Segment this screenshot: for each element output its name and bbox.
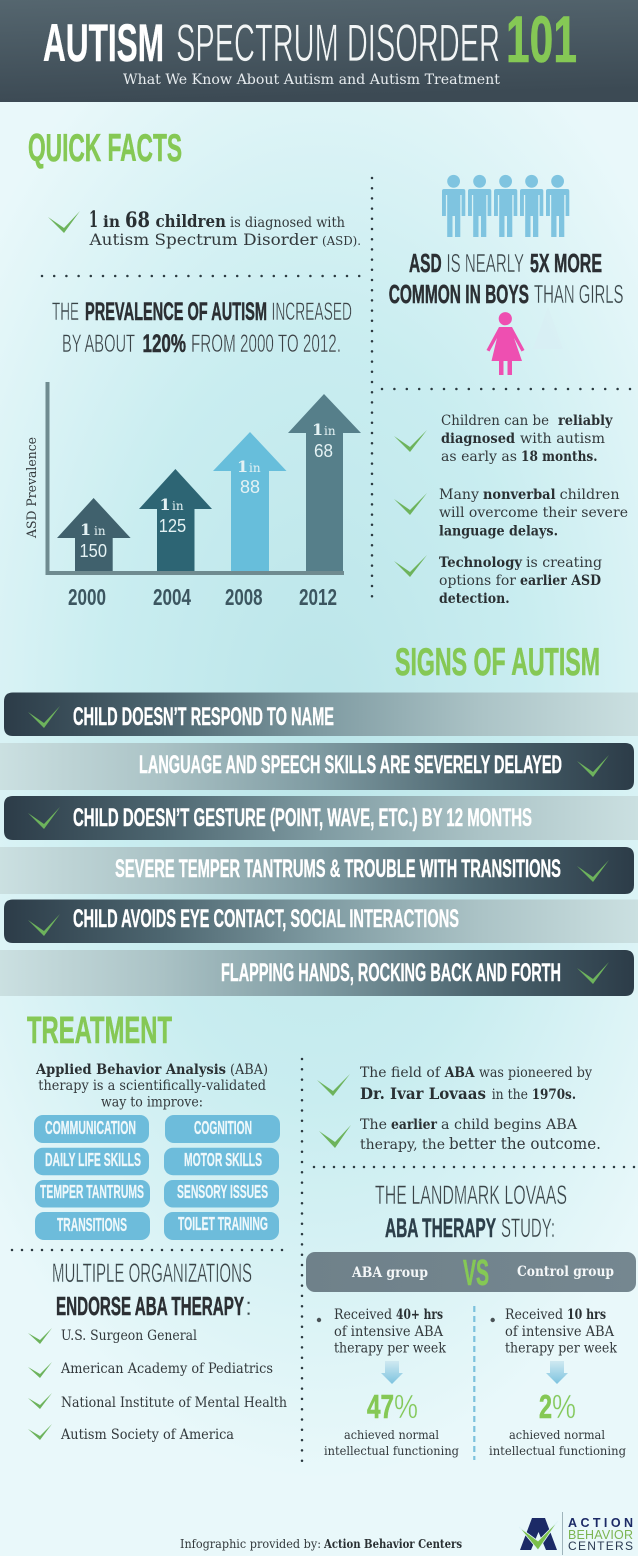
bar chart: ASD prevalence arrows [25, 382, 361, 610]
text: ABA intro: Applied Behavior Analysis [35, 1062, 226, 1078]
text: ABA intro [35, 1062, 268, 1110]
icon: five boys [442, 175, 569, 237]
banner: tantrums [0, 847, 634, 894]
list: organizations: U.S. Surgeon General [61, 1328, 197, 1344]
fact: technology: is creating [526, 555, 602, 571]
arrow 2004: 125 [159, 516, 186, 536]
text: prevalence increased: THE [52, 298, 79, 326]
fact: technology [394, 555, 602, 607]
panel: comparison header: ABA group [351, 1265, 428, 1281]
panel: skill pills: TEMPER TANTRUMS [40, 1182, 144, 1202]
panel: skill pills [34, 1115, 280, 1240]
fact: 1 in 68 children: is diagnosed with [230, 215, 345, 231]
panel: skill pills: COMMUNICATION [45, 1118, 136, 1138]
panel: control group result: 10 hrs [567, 1307, 606, 1323]
arrow 2004: in [172, 499, 184, 513]
year labels: 2012 [299, 584, 337, 610]
footer credit: Infographic provided by: [180, 1537, 321, 1551]
fact: nonverbal children: language delays. [439, 524, 558, 540]
arrow 2004 [139, 469, 212, 571]
text: ABA intro: therapy is a scientifically-validated [38, 1078, 266, 1094]
heading: multiple organizations: ENDORSE ABA THERAPY [56, 1291, 244, 1321]
fact: ABA pioneer: The field of [360, 1065, 441, 1081]
panel: ABA group result: therapy per week [334, 1340, 447, 1356]
fact: ABA pioneer: was pioneered by [479, 1065, 592, 1081]
fact: technology: detection. [439, 591, 510, 607]
banner: language and speech [0, 743, 634, 790]
text: ASD 5x more common in boys [389, 248, 624, 309]
list: organizations: American Academy of Pediatrics [60, 1361, 273, 1377]
panel: control group result: % [552, 1388, 576, 1425]
fact: 1 in 68 children: Autism Spectrum Disorder [88, 230, 318, 249]
panel: ABA group result: % [394, 1388, 418, 1425]
logo: Action Behavior Centers: CENTERS [568, 1539, 633, 1553]
fact: ABA pioneer: ABA [444, 1065, 475, 1081]
panel: ABA group result: achieved normal [344, 1427, 439, 1442]
fact: earlier begins: a child begins ABA [441, 1117, 577, 1133]
text: ABA intro: (ABA) [230, 1062, 268, 1078]
fact: earlier begins [319, 1117, 601, 1153]
divider: dashed comparison [473, 1306, 475, 1460]
panel: skill pills: DAILY LIFE SKILLS [45, 1150, 141, 1170]
fact: 1 in 68 children: 68 [125, 207, 150, 232]
panel: ABA group result: 40+ hrs [396, 1307, 443, 1323]
icon: check [48, 211, 80, 233]
icon: girl [486, 312, 524, 375]
heading: multiple organizations [52, 1258, 252, 1321]
arrow 2000: 150 [80, 541, 107, 561]
fact: ABA pioneer [317, 1065, 592, 1103]
fact: reliably diagnosed [394, 413, 614, 465]
arrow: down [381, 1361, 403, 1384]
arrow 2012 [288, 394, 361, 571]
title: AUTISM [43, 14, 164, 73]
axes [46, 382, 344, 575]
list: organizations [28, 1328, 287, 1443]
fact: earlier begins: earlier [391, 1117, 438, 1133]
arrow 2004: 1 [160, 495, 171, 514]
list: organizations: Autism Society of America [60, 1427, 234, 1443]
panel: comparison header: Control group [517, 1264, 614, 1280]
footer credit [180, 1537, 462, 1551]
fact: reliably diagnosed: diagnosed [441, 431, 516, 447]
heading: quick facts: QUICK FACTS [28, 127, 182, 170]
fact: 1 in 68 children: 1 [89, 207, 98, 233]
fact: 1 in 68 children [48, 207, 361, 249]
fact: 1 in 68 children: (ASD). [322, 234, 361, 248]
subtitle: What We Know About Autism and Autism Treatment [123, 72, 501, 88]
fact: reliably diagnosed: with autism [520, 431, 605, 447]
icon: check [394, 555, 427, 577]
heading: treatment: TREATMENT [27, 1010, 172, 1052]
y axis label: ASD Prevalence [25, 437, 40, 539]
fact: nonverbal children [394, 487, 628, 540]
fact: nonverbal children: nonverbal [483, 487, 556, 503]
panel: control group result: achieved normal [509, 1427, 605, 1442]
fact: reliably diagnosed: reliably [558, 413, 614, 429]
logo: Action Behavior Centers [519, 1512, 633, 1555]
text: prevalence increased: PREVALENCE OF AUTISM [85, 298, 267, 326]
text: prevalence increased: BY ABOUT [62, 330, 135, 358]
arrow 2012: 1 [312, 420, 323, 439]
panel: skill pills: MOTOR SKILLS [184, 1150, 262, 1170]
panel: control group result: Received [505, 1307, 563, 1323]
logo: Action Behavior Centers: BEHAVIOR [568, 1528, 633, 1542]
panel: skill pills: SENSORY ISSUES [177, 1182, 268, 1202]
arrow 2012: 68 [314, 441, 333, 461]
arrow 2000: 1 [80, 520, 91, 539]
text: ASD 5x more common in boys: COMMON IN BOYS [389, 279, 529, 309]
panel: comparison header: VS [463, 1252, 489, 1293]
banner: responds to name [4, 692, 638, 736]
year labels [68, 584, 337, 610]
fact: ABA pioneer: in the [492, 1087, 528, 1103]
list: organizations: National Institute of Mental Health [61, 1395, 287, 1411]
banner: gesture [4, 796, 638, 840]
divider dots: treatment vertical [301, 1059, 303, 1463]
fact: earlier begins: The [360, 1117, 387, 1133]
fact: reliably diagnosed: 18 months. [521, 449, 598, 465]
heading: landmark Lovaas study: STUDY: [501, 1213, 555, 1243]
panel: control group result: 2 [539, 1388, 552, 1425]
fact: reliably diagnosed: as early as [441, 449, 517, 465]
panel: ABA group result: Received [334, 1307, 392, 1323]
text: ASD 5x more common in boys: IS NEARLY [446, 248, 524, 278]
fact: ABA pioneer: Dr. Ivar Lovaas [360, 1084, 486, 1103]
panel: control group result: therapy per week [505, 1340, 618, 1356]
year labels: 2000 [68, 584, 106, 610]
icon: check [394, 430, 427, 452]
icon: check [317, 1074, 350, 1096]
heading: multiple organizations: : [245, 1291, 252, 1321]
text: prevalence increased [52, 298, 352, 358]
footer credit: Action Behavior Centers [323, 1537, 462, 1551]
text: ABA intro: way to improve: [101, 1094, 203, 1110]
heading: multiple organizations: MULTIPLE ORGANIZATIONS [52, 1258, 252, 1288]
icon: faded girl [533, 307, 563, 349]
fact: earlier begins: better the outcome. [449, 1135, 601, 1153]
arrow 2008 [213, 432, 286, 571]
header banner [0, 0, 638, 102]
panel: comparison header [306, 1252, 636, 1293]
panel: control group result: intellectual functioning [489, 1443, 626, 1458]
fact: nonverbal children: Many [439, 487, 479, 503]
banner: flapping hands [0, 950, 634, 996]
arrow 2008: 88 [240, 477, 260, 497]
year labels: 2008 [225, 584, 263, 610]
arrow 2008: in [249, 461, 261, 475]
arrow 2012: in [324, 424, 336, 438]
panel: ABA group result: 47 [367, 1388, 394, 1425]
panel: ABA group result: of intensive ABA [334, 1324, 443, 1340]
year labels: 2004 [153, 584, 191, 610]
fact: 1 in 68 children: children [156, 212, 226, 232]
panel: signs banners [0, 692, 638, 996]
text: ASD 5x more common in boys: ASD [409, 248, 442, 278]
arrow: down [546, 1361, 568, 1384]
panel: ABA group result: intellectual functioning [324, 1443, 459, 1458]
fact: 1 in 68 children: in [103, 212, 120, 231]
text: prevalence increased: 120% [142, 330, 186, 358]
panel: ABA group result [317, 1307, 459, 1458]
panel: control group result [489, 1307, 626, 1458]
banner: responds to name: CHILD DOESN’T RESPOND TO NAME [73, 703, 334, 731]
fact: ABA pioneer: 1970s. [532, 1087, 576, 1103]
text: prevalence increased: FROM 2000 TO 2012. [191, 330, 341, 358]
icon: check [319, 1125, 351, 1148]
title [43, 2, 577, 76]
fact: reliably diagnosed: Children can be [441, 413, 549, 429]
panel: skill pills: TRANSITIONS [57, 1215, 127, 1235]
heading: landmark Lovaas study: ABA THERAPY [385, 1213, 496, 1243]
heading: landmark Lovaas study [375, 1180, 567, 1243]
arrow 2000 [57, 498, 131, 571]
fact: nonverbal children: will overcome their severe [439, 505, 628, 521]
logo: Action Behavior Centers: ACTION [568, 1516, 633, 1530]
fact: technology: options for [439, 573, 517, 589]
panel: skill pills: COGNITION [194, 1118, 252, 1138]
fact: nonverbal children: children [560, 487, 620, 503]
panel: control group result: of intensive ABA [505, 1324, 614, 1340]
banner: eye contact [4, 900, 638, 943]
fact: technology: earlier ASD [520, 573, 601, 589]
title: 101 [506, 2, 577, 76]
arrow 2008: 1 [237, 457, 248, 476]
icon: check [394, 493, 427, 515]
text: prevalence increased: INCREASED [272, 298, 352, 326]
panel: skill pills: TOILET TRAINING [178, 1214, 268, 1234]
fact: earlier begins: therapy, the [360, 1137, 445, 1153]
divider dots: quick facts vertical [371, 178, 373, 606]
fact: technology: Technology [439, 555, 523, 571]
arrow 2000: in [94, 524, 106, 538]
